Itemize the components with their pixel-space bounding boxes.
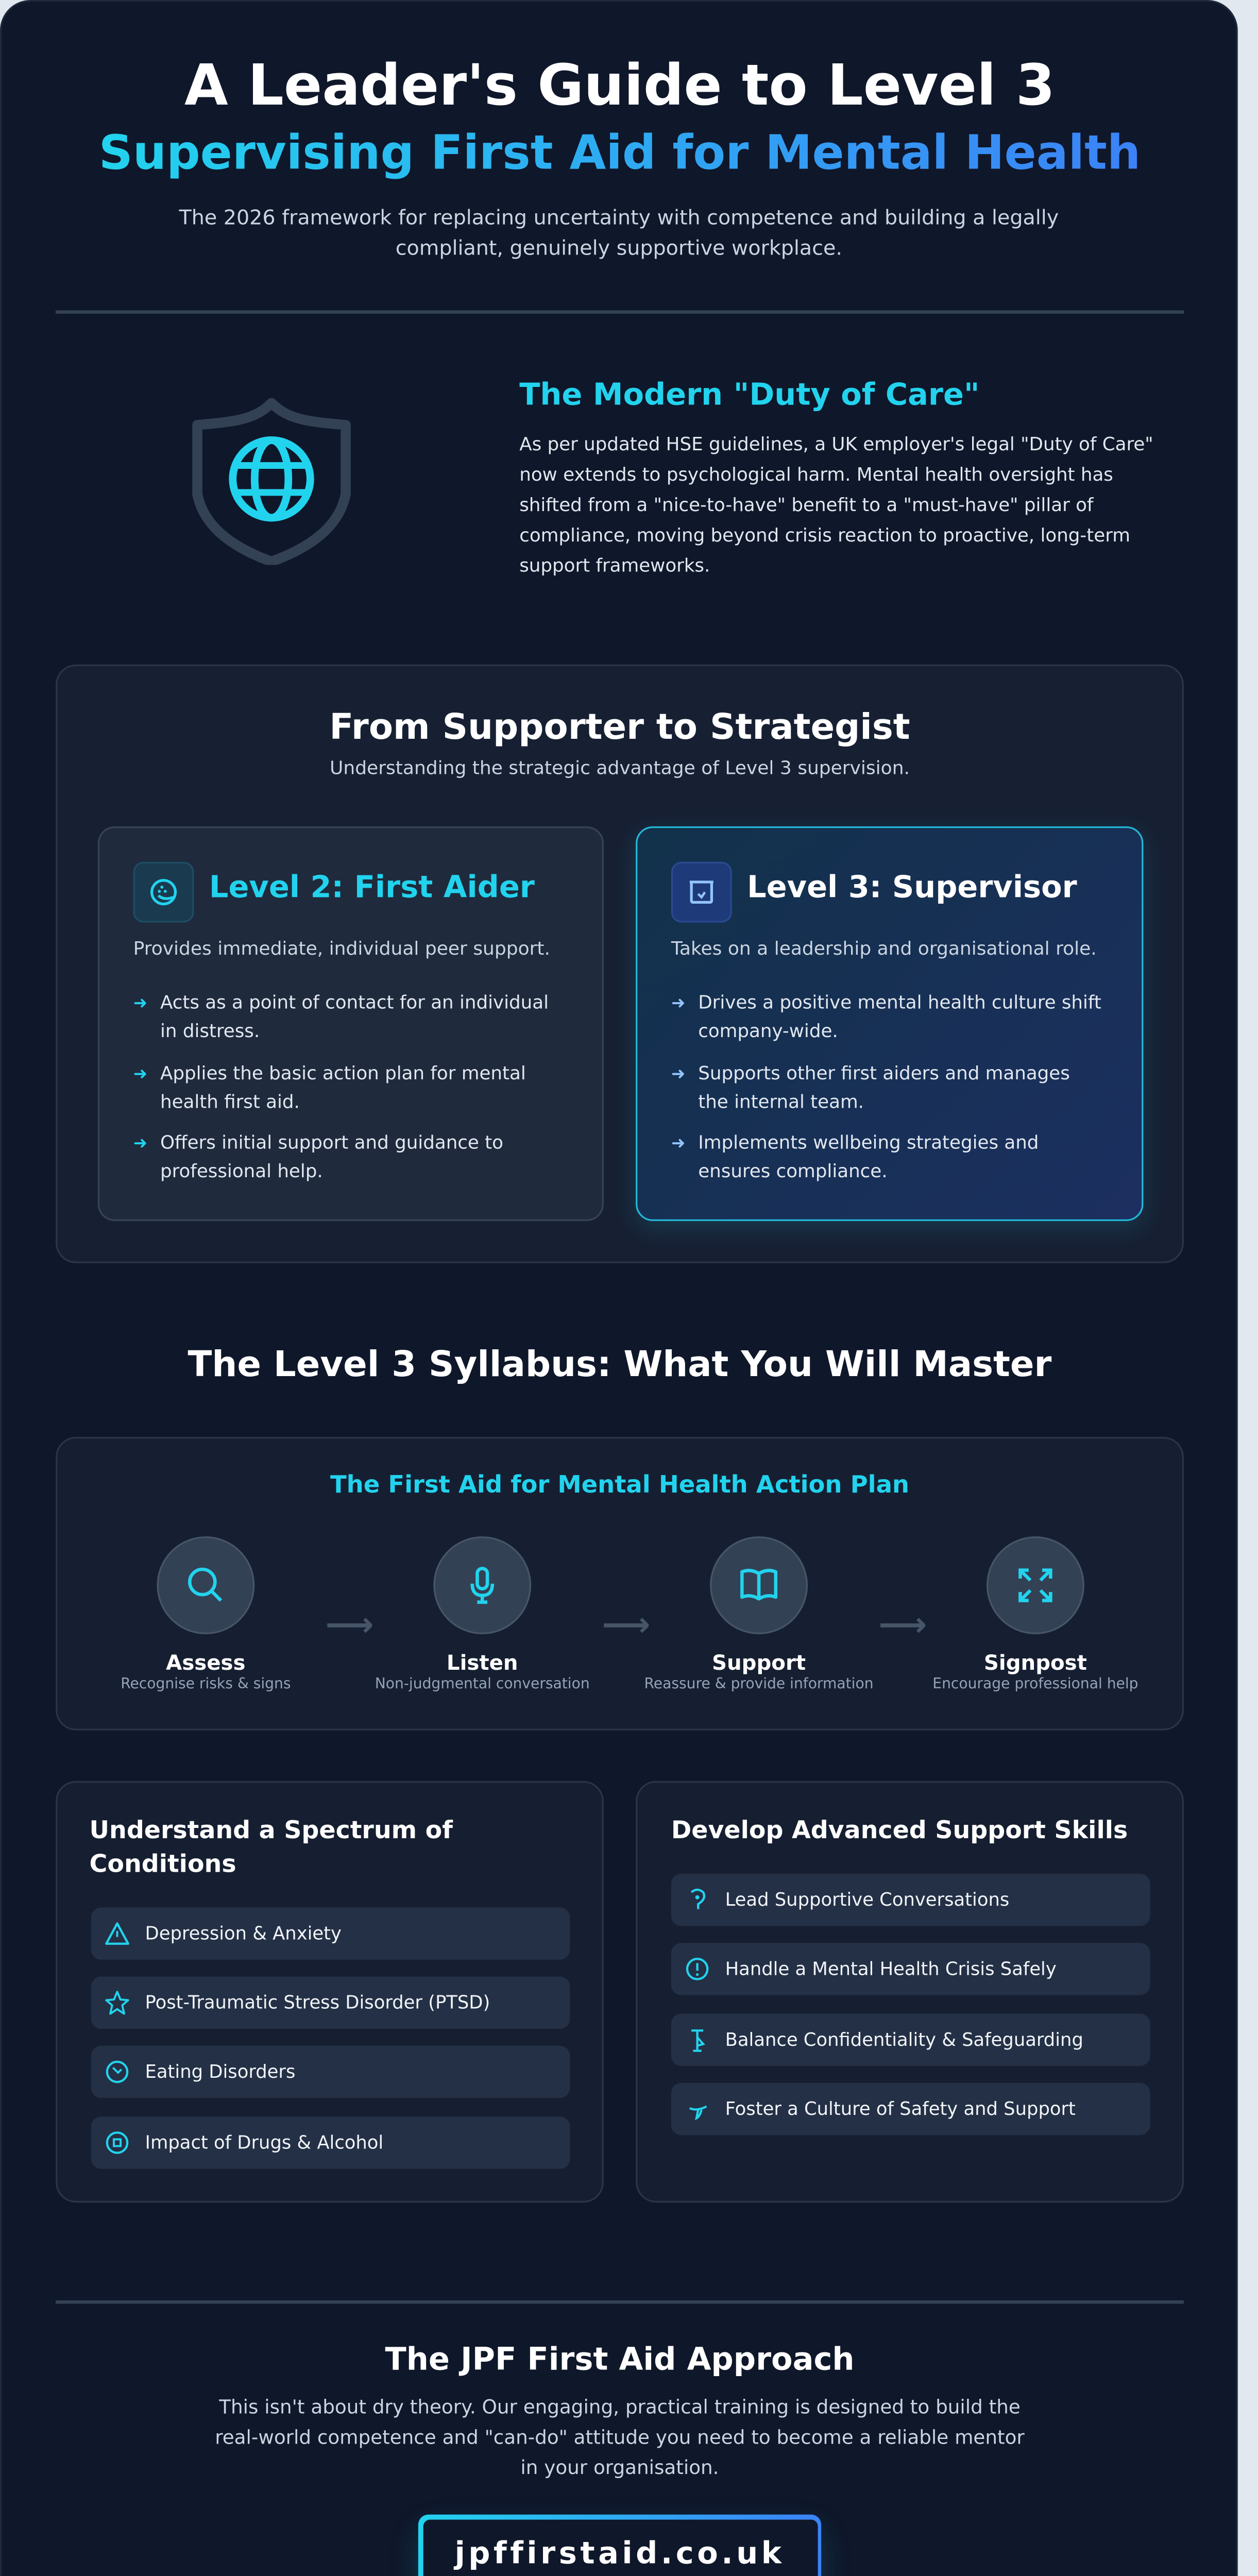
title: A Leader's Guide to Level 3 [184,52,1055,118]
subtitle: Supervising First Aid for Mental Health [99,125,1141,180]
step: support: Reassure & provide information [644,1676,874,1693]
card: level 2: ➜ [133,1135,147,1154]
heading: Level 3: Supervisor [747,870,1077,906]
icon: shield globe [192,398,351,565]
icon: cup [671,862,732,923]
step: signpost: Encourage professional help [932,1676,1138,1693]
heading: Develop Advanced Support Skills [671,1818,1128,1845]
bullets: ➜ [133,995,147,1013]
step: support [644,1536,874,1693]
panel: conditions [56,1781,604,2202]
item: Lead Supportive Conversations [725,1889,1009,1911]
item: Handle a Mental Health Crisis Safely [725,1958,1057,1980]
card: level 3: ➜ [671,1066,685,1084]
duty of care text: As per updated HSE guidelines, a UK employer's legal "Duty of Care" now extends to psychological harm. Mental health oversight has shifted from a "nice-to-have" benefit to a "must-have" pillar of compliance, moving beyond crisis reaction to proactive, long-term support frameworks. [519,433,1153,577]
item: Eating Disorders [145,2061,295,2083]
item [91,1977,570,2029]
arrow: ⟶ [326,1604,374,1645]
step: assess [121,1536,291,1693]
card: level 2: ➜ [133,1066,147,1084]
approach heading: The JPF First Aid Approach [385,2343,854,2378]
bullets: Acts as a point of contact for an individual in distress. [160,992,549,1041]
website button [418,2515,821,2576]
card: level 3: Implements wellbeing strategies and ensures compliance. [698,1132,1039,1181]
icon: face [133,862,194,923]
heading: The First Aid for Mental Health Action Plan [330,1472,909,1499]
approach text: This isn't about dry theory. Our engaging, practical training is designed to build the real-world competence and "can-do" attitude you need to become a reliable mentor in your organisation. [215,2395,1025,2479]
subheading: Understanding the strategic advantage of Level 3 supervision. [330,757,910,779]
item [91,1907,570,1960]
card: level 2: Provides immediate, individual peer support. [133,938,550,960]
item [671,2083,1150,2135]
panel: action plan [56,1437,1184,1731]
item: Balance Confidentiality & Safeguarding [725,2029,1083,2051]
item [91,2046,570,2098]
card: level 3: Supports other first aiders and manages the internal team. [698,1062,1070,1112]
arrow: ⟶ [602,1604,650,1645]
syllabus heading: The Level 3 Syllabus: What You Will Master [188,1344,1051,1385]
card: level 2: Applies the basic action plan for mental health first aid. [160,1062,526,1112]
card: level 2 [98,826,604,1221]
arrow: ⟶ [878,1604,927,1645]
card: level 2: Offers initial support and guidance to professional help. [160,1132,503,1181]
bullets: ➜ [671,995,685,1013]
panel: support skills [636,1781,1184,2202]
intro text: The 2026 framework for replacing uncertainty with competence and building a legally compliant, genuinely supportive workplace. [179,206,1059,260]
website button: jpffirstaid.co.uk [455,2536,785,2571]
step: signpost [932,1536,1138,1693]
card: level 3: ➜ [671,1135,685,1154]
panel: supporter to strategist [56,665,1184,1263]
heading: Level 2: First Aider [209,870,535,906]
heading: Understand a Spectrum of Conditions [89,1818,453,1879]
card: level 3 [636,826,1143,1221]
item: Foster a Culture of Safety and Support [725,2098,1076,2120]
duty of care heading: The Modern "Duty of Care" [519,378,980,413]
item [671,1943,1150,1995]
step: support: Support [712,1651,806,1675]
item [671,1874,1150,1926]
item: Impact of Drugs & Alcohol [145,2132,383,2154]
step: listen: Listen [447,1651,518,1675]
step: listen [375,1536,590,1693]
step: assess: Assess [166,1651,245,1675]
item [91,2116,570,2169]
item [671,2014,1150,2066]
step: signpost: Signpost [984,1651,1087,1675]
item: Depression & Anxiety [145,1923,342,1944]
step: assess: Recognise risks & signs [121,1676,291,1693]
item: Post-Traumatic Stress Disorder (PTSD) [145,1992,490,2014]
bullets: Drives a positive mental health culture shift company-wide. [698,992,1101,1041]
step: listen: Non-judgmental conversation [375,1676,590,1693]
card: level 3: Takes on a leadership and organisational role. [671,938,1097,960]
heading: From Supporter to Strategist [329,707,910,747]
